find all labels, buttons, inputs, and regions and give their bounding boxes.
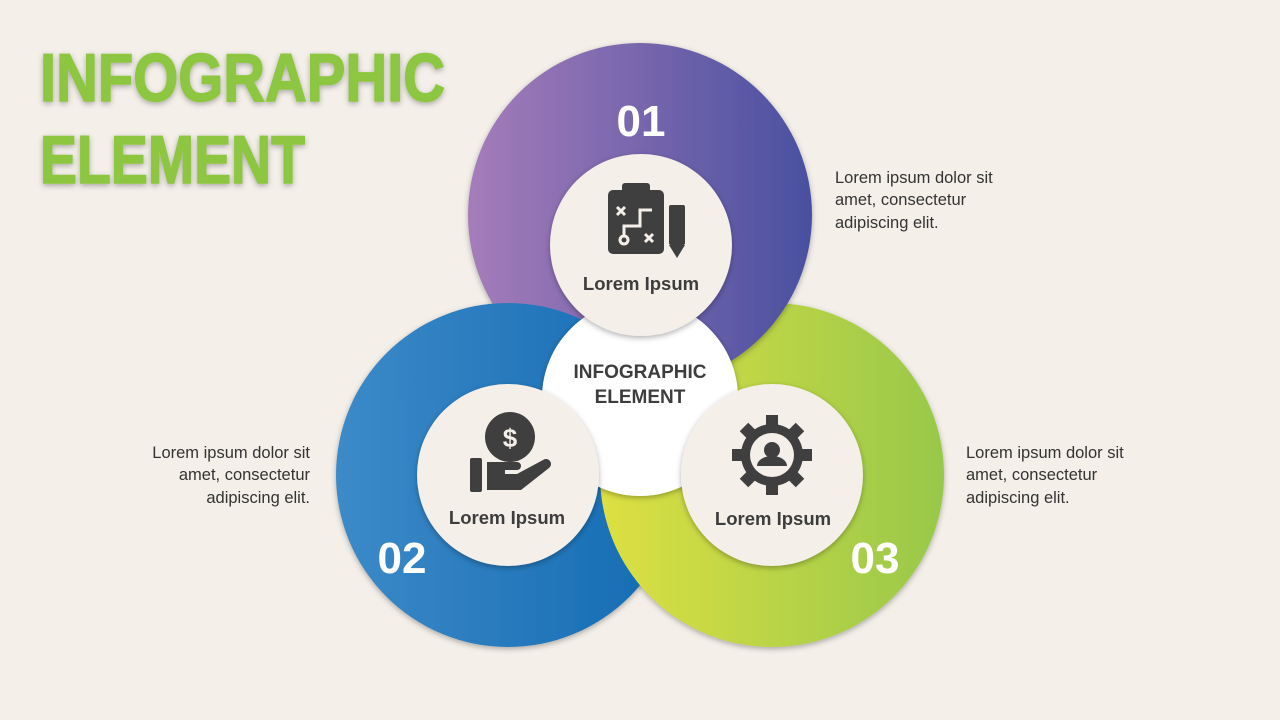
text: 02 description: Lorem ipsum dolor sit: [152, 444, 310, 462]
ring: green 03: [600, 303, 944, 647]
text: 03 description: adipiscing elit.: [966, 489, 1070, 507]
text: 01 description: [835, 169, 993, 232]
ring: blue 02: [336, 303, 680, 647]
icon: plan clipboard: [608, 183, 685, 258]
ring: green over blue bottom: [600, 487, 715, 638]
inner circle 3: Lorem Ipsum: [715, 508, 831, 529]
text: 02 description: amet, consectetur: [179, 466, 310, 484]
number 02: 02: [378, 534, 426, 583]
center circle: INFOGRAPHIC: [574, 362, 707, 383]
text: 02 description: [152, 444, 310, 507]
inner circle 3: [681, 384, 863, 566]
title: INFOGRAPHIC: [40, 40, 445, 116]
inner circle 1: [550, 154, 732, 336]
text: 01 description: amet, consectetur: [835, 191, 967, 209]
text: 03 description: amet, consectetur: [966, 466, 1098, 484]
ring: blue over purple: [353, 303, 582, 400]
text: 02 description: adipiscing elit.: [206, 489, 310, 507]
inner circle 2: Lorem Ipsum: [449, 507, 565, 528]
icon: gear person: [732, 415, 812, 495]
center circle: [542, 300, 738, 496]
text: 03 description: [966, 444, 1124, 507]
text: 03 description: Lorem ipsum dolor sit: [966, 444, 1124, 462]
inner circle 2: [417, 384, 599, 566]
number 01: 01: [617, 97, 665, 146]
text: 01 description: adipiscing elit.: [835, 214, 939, 232]
icon: money hand: [470, 412, 551, 492]
title: [40, 40, 445, 198]
inner circle 1: Lorem Ipsum: [583, 273, 699, 294]
title: ELEMENT: [40, 122, 305, 198]
icon: money hand: $: [503, 423, 518, 453]
center circle: ELEMENT: [595, 387, 686, 408]
number 03: 03: [851, 534, 899, 583]
ring: purple 01: [468, 43, 812, 387]
text: 01 description: Lorem ipsum dolor sit: [835, 169, 993, 187]
